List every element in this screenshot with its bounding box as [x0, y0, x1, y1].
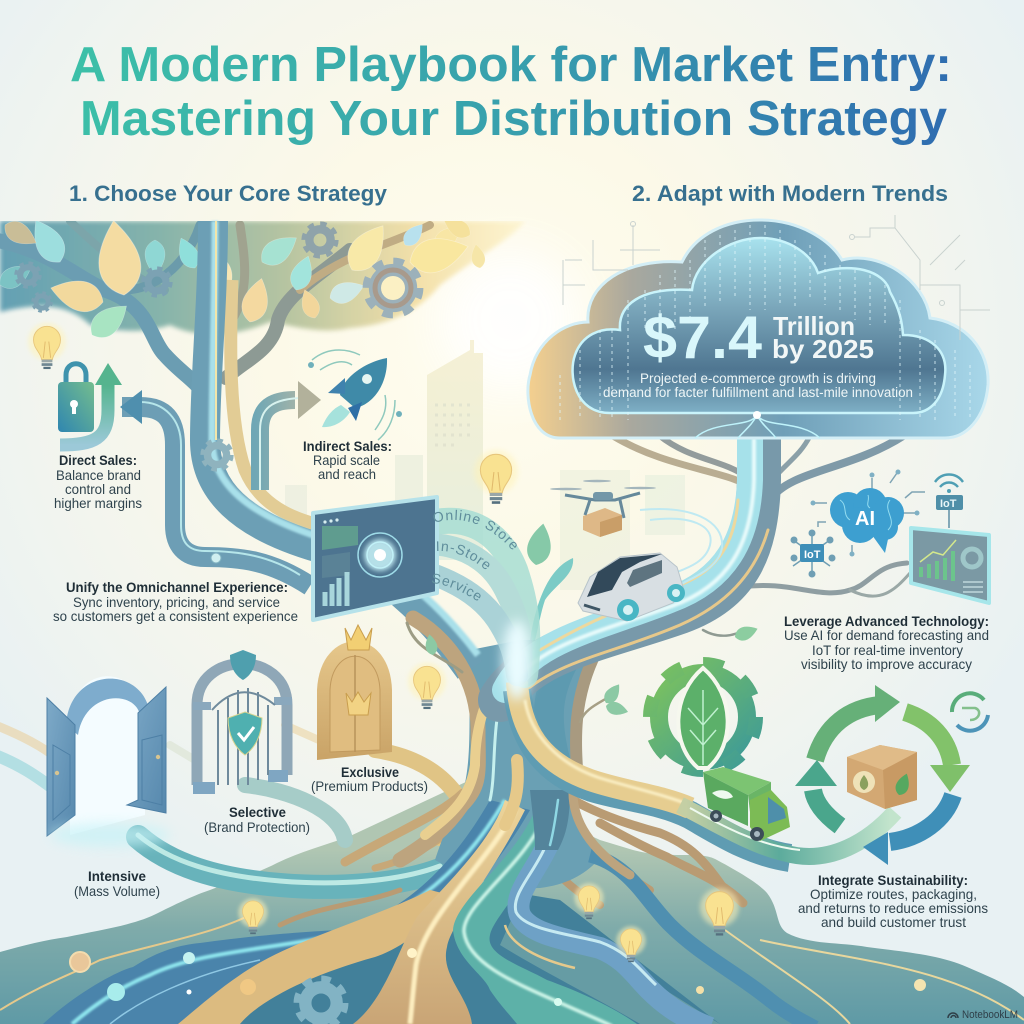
- text: indirect sales: Rapid scale: [313, 452, 380, 468]
- text: omnichannel: Unify the Omnichannel Experience:: [66, 579, 288, 595]
- sun glow: [440, 250, 580, 390]
- door path beams: [0, 725, 330, 790]
- text: technology: visibility to improve accuracy: [801, 656, 972, 672]
- stat: $7.4: [643, 304, 763, 371]
- small leaf on road branch: [733, 623, 760, 643]
- icon: rocket: [308, 350, 402, 440]
- ribbon labels: Online Store: [434, 510, 517, 550]
- text: sustainability: and build customer trust: [821, 914, 966, 930]
- icon: analytics panel: [911, 528, 989, 603]
- icon: light bulb left: [28, 323, 66, 369]
- gears on left tree: [16, 224, 420, 315]
- dashboard with channels: [311, 495, 540, 688]
- circuit lines: [563, 215, 990, 340]
- arrow: indirect sales: [260, 381, 321, 490]
- cloud with stat: [528, 220, 988, 438]
- cloud with stat: Projected e-commerce growth is driving: [640, 371, 876, 386]
- dashboard with channels: In-Store: [437, 541, 490, 570]
- skyline: [285, 340, 685, 590]
- icon: IoT node: IoT: [804, 549, 821, 561]
- icon: lock with up arrow: [58, 363, 122, 445]
- heading: section 1: 1. Choose Your Core Strategy: [69, 181, 388, 206]
- text: omnichannel: Sync inventory, pricing, and service: [73, 594, 280, 610]
- trunk mass: [435, 640, 605, 888]
- icon: IoT tag with wifi: [935, 474, 963, 528]
- text: indirect sales: Indirect Sales:: [303, 438, 392, 454]
- text: exclusive: [311, 764, 428, 794]
- teal flow: [453, 810, 637, 1024]
- dark ground under flows: [170, 885, 720, 1024]
- blue root right: [518, 820, 710, 1024]
- title: [70, 38, 952, 146]
- icon: recycling loop with box: [795, 685, 970, 865]
- icon: gear on trunk: [202, 440, 232, 470]
- icon: green truck: [703, 767, 790, 841]
- icon: car: [578, 553, 685, 621]
- arrow: direct sales: [120, 390, 310, 586]
- gold band left: [178, 890, 450, 1024]
- text: omnichannel: [53, 579, 298, 624]
- icon: bulb by exclusive door: [408, 663, 446, 709]
- icon: mini refresh: [952, 693, 988, 731]
- branches: [0, 221, 430, 395]
- text: technology: Use AI for demand forecasting and: [784, 627, 989, 643]
- cloud with stat: Trillion: [773, 311, 855, 341]
- dashboard with channels: Service: [432, 574, 481, 600]
- text: direct sales: [54, 452, 142, 511]
- text: technology: Leverage Advanced Technology:: [784, 613, 989, 629]
- heading: section 2: 2. Adapt with Modern Trends: [632, 181, 948, 206]
- root flows: [0, 800, 1024, 1024]
- cloud with stat: demand for facter fulfillment and last-mile innovation: [603, 385, 913, 400]
- cloud with stat: by 2025: [772, 334, 874, 364]
- text: sustainability: Optimize routes, packaging,: [810, 886, 977, 902]
- text: intensive: Intensive: [88, 868, 146, 884]
- text: exclusive: Exclusive: [341, 764, 399, 780]
- text: direct sales: control and: [65, 481, 131, 497]
- road up to cloud: [500, 436, 768, 700]
- cloud tree: branches: [613, 436, 910, 636]
- text: direct sales: higher margins: [54, 495, 142, 511]
- central glow: [503, 620, 531, 700]
- gold lines on ground: [0, 915, 250, 1010]
- text: technology: [784, 613, 989, 672]
- left tree trunk: [205, 221, 478, 670]
- watermark: NotebookLM: [962, 1009, 1018, 1021]
- inner cloud: [573, 238, 945, 413]
- leaves: [0, 221, 485, 338]
- text: direct sales: Balance brand: [56, 467, 141, 483]
- icon: AI brain: [810, 470, 925, 556]
- text: selective: (Brand Protection): [204, 819, 310, 835]
- icon: gear on ground: [297, 979, 345, 1024]
- icon: exclusive door: [317, 625, 392, 760]
- roots of glow: [695, 411, 820, 438]
- icon: bulb centre: [474, 450, 518, 504]
- road trails behind car: [640, 509, 722, 585]
- icon: bulbs on ground: [238, 883, 739, 962]
- icon: drone with parcel: [550, 480, 656, 537]
- title: A Modern Playbook for Market Entry:: [70, 38, 952, 92]
- text: sustainability: [798, 872, 988, 930]
- central trunk: [400, 618, 630, 875]
- ground: [0, 780, 1024, 1024]
- text: selective: [204, 804, 310, 835]
- text: intensive: (Mass Volume): [74, 883, 160, 899]
- title: Mastering Your Distribution Strategy: [80, 92, 947, 146]
- text: omnichannel: so customers get a consistent experience: [53, 608, 298, 624]
- text: technology: IoT for real-time inventory: [812, 642, 963, 658]
- icon: selective gate: [193, 650, 292, 794]
- text: intensive: [74, 868, 160, 899]
- blue flow left: [43, 800, 530, 1024]
- selective ribbon: [138, 750, 500, 887]
- roots: [280, 793, 743, 925]
- icon: AI brain: AI: [855, 508, 875, 530]
- text: indirect sales: and reach: [318, 466, 376, 482]
- text: sustainability: and returns to reduce emissions: [798, 900, 988, 916]
- data rain: [560, 225, 970, 420]
- ground between flows right: [500, 900, 720, 1024]
- panel: screen: [313, 497, 437, 620]
- icon: IoT tag with wifi: IoT: [940, 498, 957, 510]
- icon: intensive open door: [47, 676, 170, 847]
- icon: gear with leaf: [650, 664, 756, 770]
- ribbons: [385, 521, 527, 675]
- text: indirect sales: [303, 438, 392, 482]
- road to truck: [517, 682, 895, 858]
- text: selective: Selective: [229, 804, 286, 820]
- small leaves near trunk: [424, 522, 630, 718]
- text: exclusive: (Premium Products): [311, 778, 428, 794]
- text: direct sales: Direct Sales:: [59, 452, 137, 468]
- icon: IoT node: [790, 530, 836, 578]
- gold band centre: [353, 800, 525, 1024]
- text: sustainability: Integrate Sustainability:: [818, 872, 968, 888]
- left tree canopy: [0, 213, 525, 395]
